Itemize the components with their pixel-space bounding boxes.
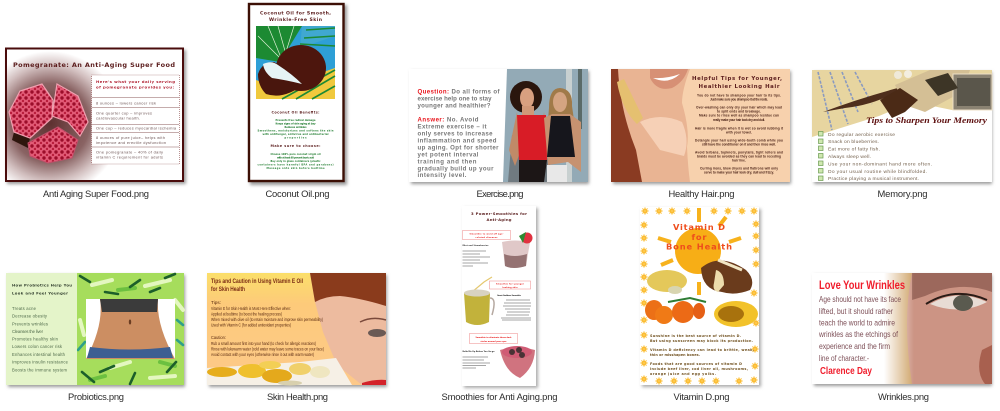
hair tips text: You do not have to shampoo your hair to its tips. xyxy=(697,94,781,98)
facts box: One cup – reduces myocardial ischemia xyxy=(96,126,177,130)
probiotics text panel xyxy=(6,273,77,385)
smoothie 2: Great Goddess Smoothie xyxy=(497,294,522,297)
skin health tips: Caution: xyxy=(211,335,226,340)
probiotics text panel: Cleanses the liver xyxy=(12,329,44,334)
exercise Q and A text: up aging. Opt for shorter xyxy=(418,144,499,152)
skin health tips: Applied at bedtime (to boost the healing process) xyxy=(211,312,282,316)
exercise Q and A text: yet potent interval xyxy=(418,152,479,158)
coconut benefits text: Massage onto skin before bedtime xyxy=(266,167,325,170)
smoothie 3: Smoothie to eliminate those dark xyxy=(476,336,512,339)
facts box xyxy=(92,75,180,164)
smoothies title: 3 Power-Smoothies for xyxy=(471,211,527,216)
coconut title: Coconut Oil for Smooth, xyxy=(260,10,331,16)
vitamin D text xyxy=(650,334,754,376)
hair tips text: hairline. xyxy=(732,158,746,162)
skin health tips: Rinse with lukewarm water (cold water may leave some traces on your face) xyxy=(211,346,324,352)
caption: Anti Aging Super Food: Anti Aging Super Food.png xyxy=(43,188,149,199)
probiotics text panel: Lowers colon cancer risk xyxy=(12,344,63,349)
wrinkles quote: lifted, but it should rather xyxy=(819,306,893,316)
facts box: cardiovascular health. xyxy=(96,116,140,120)
skin health title: Tips and Caution in Using Vitamin E Oil xyxy=(211,278,303,285)
exercise Q and A text: only serves to increase xyxy=(418,130,493,138)
wrinkles quote xyxy=(818,294,901,363)
tile: memory xyxy=(812,70,992,184)
vitamin D title: Vitamin D xyxy=(673,222,725,232)
vitamin D text: orange juice and egg yolks. xyxy=(650,372,716,376)
vitamin D title: for xyxy=(692,232,707,242)
tile: healthy hair: Healthier Looking Hair xyxy=(698,84,780,90)
skin health tips: When mixed with olive oil (to retain moisture and improve skin permeability) xyxy=(211,317,323,322)
wrinkles quote: Age should not have its face xyxy=(819,294,901,304)
memory checklist: Always sleep well. xyxy=(828,154,871,160)
vitamin D text: Vitamin D deficiency can lead to brittle, weak, xyxy=(650,348,754,352)
probiotics text panel: Improves insulin resistance xyxy=(12,360,69,364)
memory checklist: Do your usual routine while blindfolded. xyxy=(828,169,927,175)
skin health tips: Rub a small amount first into your hand (to check for allergic reactions) xyxy=(211,341,316,346)
exercise Q and A text xyxy=(418,88,500,179)
vitamin D text: But using sunscreen may block its production. xyxy=(650,339,753,343)
vitamin D title: Bone Health xyxy=(666,242,732,252)
hair tips text: Just make sure you shampoo it at the roots. xyxy=(710,98,768,102)
memory title: Tips to Sharpen Your Memory xyxy=(866,115,987,125)
skin health tips: Tips: xyxy=(211,300,221,305)
coconut benefits text: Coconut Oil Benefits: xyxy=(272,110,320,114)
caption: Exercise: Exercise.png xyxy=(476,188,524,199)
hair tips text: Curling irons, blow dryers and flatirons will only xyxy=(700,166,778,170)
vitamin D text: Sunshine is the best source of vitamin D. xyxy=(650,334,741,338)
coconut benefits text: Prevents free radical damage xyxy=(276,119,316,122)
coconut benefits text: containers have harmful BPA and parabens) xyxy=(258,164,334,166)
vitamin D title xyxy=(666,222,732,252)
caption: Probiotics: Probiotics.png xyxy=(68,391,124,402)
tile: coconut oil: Wrinkle-Free Skin xyxy=(269,17,322,23)
wrinkles face photo xyxy=(884,273,992,384)
hair title: Helpful Tips for Younger, xyxy=(692,76,782,82)
vitamin D text: Foods that are good sources of vitamin D xyxy=(650,362,742,366)
tile: smoothies xyxy=(462,206,538,388)
smoothie 1: Mint and Strawberries xyxy=(462,244,489,247)
tile: smoothies: Anti-Aging xyxy=(486,217,512,222)
probiotics text panel: Look and Feel Younger xyxy=(12,290,68,296)
probiotics text panel: Promotes healthy skin xyxy=(12,336,59,342)
hair tips text: Avoid terbans, topknots, ponytails, tight rollers and xyxy=(695,150,783,154)
caption: Vitamin D: Vitamin D.png xyxy=(674,391,730,402)
caption: Skin Health: Skin Health.png xyxy=(267,391,328,402)
caption: Coconut Oil: Coconut Oil.png xyxy=(266,188,330,199)
caption: Memory: Memory.png xyxy=(878,188,928,199)
tile: probiotics xyxy=(6,273,185,387)
coconut benefits text: Make sure to choose: xyxy=(270,144,320,148)
exercise photo xyxy=(503,69,588,182)
face photo xyxy=(310,273,386,385)
exercise Q and A text: Answer: No. Avoid xyxy=(418,116,479,124)
memory photo collage xyxy=(812,70,992,137)
hair tips text xyxy=(695,94,784,174)
probiotics text panel: Treats acne xyxy=(12,306,37,311)
food photos xyxy=(645,260,758,327)
hair tips text: braids must be avoided as they can lead to receding xyxy=(697,154,781,158)
probiotics text panel: Boosts the immune system xyxy=(12,368,68,372)
caption: Healthy Hair: Healthy Hair.png xyxy=(668,188,734,199)
smoothie 3: Bella Me Up Before You Go-go xyxy=(462,350,495,353)
hair tips text: with your towel. xyxy=(725,130,752,134)
wrinkles title: Love Your Wrinkles xyxy=(819,278,905,292)
hair photo xyxy=(611,69,690,182)
coconut benefits text: Reduces wrinkles xyxy=(284,126,307,129)
hair tips text: Hair is more fragile when it is wet so avoid rubbing it xyxy=(695,126,784,130)
memory checklist: Snack on blueberries. xyxy=(828,139,879,145)
vitamin E capsules xyxy=(207,358,352,386)
hair tips text: Detangle your hair using wide-tooth comb while you xyxy=(695,138,783,142)
memory checklist: Eat more of fatty fish. xyxy=(828,146,880,152)
coconut benefits text: Choose 100% pure coconut virgin oil xyxy=(270,153,321,156)
coconut benefits text xyxy=(258,110,334,170)
coconut benefits text: with at least 60 percent lauric acid xyxy=(277,156,314,160)
tile: coconut oil xyxy=(249,4,347,185)
exercise Q and A text: intensity level. xyxy=(418,172,467,179)
sun graphic xyxy=(658,208,741,295)
pomegranate fruit xyxy=(9,84,88,163)
probiotics text panel: Enhances intestinal health xyxy=(12,352,66,357)
skin health tips: Used with Vitamin C (for added antioxidant properties) xyxy=(211,322,291,328)
tile: healthy hair xyxy=(611,69,791,184)
facts box: impotence and erectile dysfunction xyxy=(96,140,166,145)
coconut benefits text: Smoothens, moisturizes and softens the skin xyxy=(258,130,334,132)
caption: Smoothies for Anti Aging: Smoothies for Anti Aging.png xyxy=(442,391,558,402)
exercise Q and A text: Question: Do all forms of xyxy=(418,88,500,96)
probiotics text panel: Prevents wrinkles xyxy=(12,322,48,326)
wrinkles quote: experience and the firm xyxy=(819,341,890,351)
smoothie 3: circles around your eyes xyxy=(480,340,507,343)
tile: pomegranate xyxy=(6,48,186,184)
exercise Q and A text: younger and healthier? xyxy=(418,102,491,110)
tile: exercise xyxy=(409,69,589,184)
smoothie 1: related diseases xyxy=(476,236,498,239)
wrinkles quote: teach the world to admire xyxy=(819,318,895,328)
exercise Q and A text: gradually build up your xyxy=(418,166,494,172)
wrinkles quote: line of character.- xyxy=(819,353,869,363)
coconut benefits text: with antifungal, antivirus and antibacterial xyxy=(262,133,329,136)
skin health tips: Vitamin E for Skin Health is Most Here Effective when: xyxy=(211,306,291,311)
hair tips text: really make your hair look dry and dull. xyxy=(713,118,765,122)
hair tips text: Over-washing can only dry your hair which may lead xyxy=(696,106,782,110)
memory checklist: Practice playing a musical instrument. xyxy=(828,176,919,182)
smoothie 2 xyxy=(464,277,531,325)
hair tips text: still have the conditioner on it and then rinse well. xyxy=(702,142,776,146)
wrinkles attribution: Clarence Day xyxy=(820,365,872,377)
exercise Q and A text: inflammation and speed xyxy=(418,138,497,144)
smoothie 1 xyxy=(462,230,532,268)
caption: Wrinkles: Wrinkles.png xyxy=(878,391,929,402)
vitamin D text: include beef liver, cod liver oil, mushrooms, xyxy=(650,367,748,371)
exercise Q and A text: training and then xyxy=(418,158,477,166)
exercise Q and A text: Extreme exercise – it xyxy=(418,124,486,130)
skin health tips xyxy=(211,300,324,357)
probiotics text panel: Decrease obesity xyxy=(12,314,48,318)
tile: skin health: for Skin Health xyxy=(211,286,245,293)
hair tips text: serve to make your hair look dry, dull and frizzy. xyxy=(704,170,774,174)
facts box: of pomegranate provides you: xyxy=(96,84,174,90)
sun border xyxy=(640,207,760,385)
exercise Q and A text: exercise help one to stay xyxy=(418,96,492,102)
tile: vitamin D xyxy=(640,207,761,387)
smoothie 2: looking skin xyxy=(502,287,518,289)
pomegranate title: Pomegranate: An Anti-Aging Super Food xyxy=(13,61,175,69)
coconut benefits text: Buy only in glass containers (plastic xyxy=(270,160,321,163)
coconut benefits text: Keeps signs of skin aging at bay xyxy=(276,122,316,126)
facts box: 8 ounces of pure juice– helps with xyxy=(96,135,165,140)
hair tips text: to split ends and breakage. xyxy=(717,110,761,114)
bacteria background xyxy=(78,274,183,384)
tile: skin health xyxy=(207,273,387,387)
coconut illustration xyxy=(256,26,335,99)
facts box: Here's what your daily serving xyxy=(96,79,175,84)
memory checklist xyxy=(818,132,932,182)
hair tips text: Make sure to rinse well as shampoo residue can xyxy=(699,114,779,118)
probiotics text panel: How Probiotics Help You xyxy=(12,282,72,288)
coconut benefits text: properties xyxy=(284,136,307,140)
wrinkles quote: wrinkles as the etchings of xyxy=(818,329,898,339)
skin health tips: Avoid contact with your eyes (otherwise rinse it out with warm water) xyxy=(211,352,314,357)
tile: wrinkles xyxy=(812,273,992,386)
smoothie 2: Smoothie for younger xyxy=(496,282,524,286)
facts box: One pomegranate – 40% of daily xyxy=(96,150,163,154)
smoothie 3 xyxy=(462,334,535,378)
smoothie 1: Smoothie to ward off age- xyxy=(470,232,504,236)
facts box: One quarter cup – improves xyxy=(96,110,152,116)
memory checklist: Use your non-dominant hand more often. xyxy=(828,162,932,168)
waist photo xyxy=(86,299,175,359)
vitamin D text: thin or misshapen bones. xyxy=(650,353,700,357)
facts box: 8 ounces – lowers cancer risk xyxy=(96,100,156,106)
facts box: vitamin C requirement for adults xyxy=(96,154,163,160)
memory checklist: Do regular aerobic exercise xyxy=(828,132,895,138)
